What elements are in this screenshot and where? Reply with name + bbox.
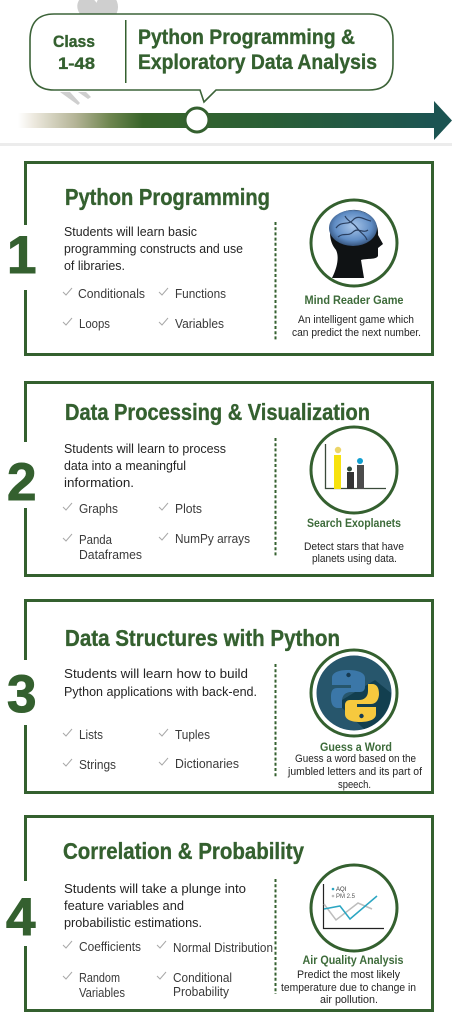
timeline arrow [18, 101, 452, 140]
panel 2 description: Students will learn to process [64, 441, 226, 456]
panel 1 checklist: Conditionals [78, 287, 145, 301]
activity description: jumbled letters and its part of [287, 766, 423, 778]
activity description: planets using data. [312, 553, 397, 565]
panel 1 description: programming constructs and use [64, 241, 243, 256]
activity description: speech. [338, 779, 371, 791]
icon: air quality line chart [311, 865, 397, 951]
panel 3 description: Python applications with back-end. [64, 684, 257, 699]
class label: Class [53, 32, 95, 51]
activity description [292, 314, 421, 339]
activity description: An intelligent game which [298, 314, 414, 326]
class label: 1-48 [58, 54, 95, 73]
panel 4 checklist: Variables [79, 986, 125, 1000]
panel 2 checklist: Panda [79, 533, 112, 547]
panel 4: Correlation & Probability [6, 816, 432, 1010]
icon: bar chart of stars [311, 427, 397, 513]
panel 2 checklist: Plots [175, 502, 202, 516]
activity description: Guess a word based on the [295, 753, 416, 765]
timeline marker [185, 108, 209, 132]
panel 2 checklist [63, 502, 250, 562]
panel 4 checklist: Normal Distribution [173, 941, 273, 955]
number 4: 4 [6, 888, 36, 947]
panel 3 frame [26, 600, 432, 792]
panel 4 description [64, 881, 246, 930]
activity description: temperature due to change in [281, 982, 416, 994]
panel 4 description: Students will take a plunge into [64, 881, 246, 896]
panel 1 description: of libraries. [64, 258, 125, 273]
main title [138, 26, 377, 74]
activity description: Predict the most likely [297, 969, 401, 981]
panel 1 checklist [63, 287, 226, 331]
activity title: Air Quality Analysis [302, 955, 404, 967]
activity description: can predict the next number. [292, 327, 421, 339]
main title: Exploratory Data Analysis [138, 51, 377, 74]
panel 3 description: Students will learn how to build [64, 666, 248, 681]
activity description: air pollution. [320, 994, 378, 1006]
class label [53, 32, 95, 73]
panel 3 checklist: Strings [79, 758, 116, 772]
header divider [125, 20, 126, 83]
activity title: Guess a Word [320, 742, 392, 754]
activity description [281, 969, 416, 1006]
number 2: 2 [7, 453, 36, 512]
panel 2 description [64, 441, 226, 490]
page edge rule [0, 143, 452, 146]
panel 1 description: Students will learn basic [64, 224, 197, 239]
panel 1: Python Programming [7, 162, 432, 354]
panel 3 checklist: Dictionaries [175, 757, 239, 771]
panel 2 checklist: Dataframes [79, 548, 142, 562]
panel 2 frame [26, 382, 432, 576]
panel 4 description: feature variables and [64, 898, 184, 913]
panel 4 checklist: Coefficients [79, 940, 141, 954]
panel 1 frame [26, 162, 432, 354]
icon: air quality line chart: PM 2.5 [336, 894, 356, 900]
activity title: Mind Reader Game [304, 295, 404, 307]
panel 1 checklist: Variables [175, 317, 224, 331]
header speech bubble [30, 14, 393, 102]
panel 3 checklist [63, 728, 239, 772]
activity title: Search Exoplanets [307, 518, 401, 530]
panel 4 checklist: Probability [173, 985, 230, 999]
panel 4 description: probabilistic estimations. [64, 915, 202, 930]
panel 4 heading: Correlation & Probability [63, 838, 304, 864]
panel 1 heading: Python Programming [65, 184, 270, 210]
panel 2 heading: Data Processing & Visualization [65, 399, 370, 425]
icon: python logo [311, 650, 397, 736]
panel 1 description [64, 224, 243, 273]
panel 3: Data Structures with Python [7, 600, 432, 792]
panel 1 checklist: Functions [175, 287, 226, 301]
icon: brain in head [311, 200, 397, 286]
panel 4 checklist: Conditional [173, 971, 232, 985]
number 1: 1 [7, 226, 36, 285]
activity description [287, 753, 423, 791]
panel 4 frame [26, 816, 432, 1010]
panel 2 checklist: Graphs [79, 502, 118, 516]
panel 1 checklist: Loops [79, 317, 110, 331]
panel 3 checklist: Lists [79, 728, 103, 742]
number 3: 3 [7, 665, 36, 724]
icon: air quality line chart: AQI [336, 887, 347, 893]
panel 2 description: information. [64, 475, 134, 490]
panel 2: Data Processing & Visualization [7, 382, 432, 576]
panel 2 checklist: NumPy arrays [175, 532, 250, 546]
activity description [304, 541, 404, 565]
panel 4 checklist: Random [79, 971, 120, 985]
main title: Python Programming & [138, 26, 355, 49]
decorative hand behind bubble [60, 0, 118, 105]
panel 2 description: data into a meaningful [64, 458, 186, 473]
panel 3 checklist: Tuples [175, 728, 210, 742]
activity description: Detect stars that have [304, 541, 404, 553]
panel 3 description [64, 666, 257, 699]
panel 4 checklist [63, 940, 273, 1000]
panel 3 heading: Data Structures with Python [65, 625, 340, 651]
